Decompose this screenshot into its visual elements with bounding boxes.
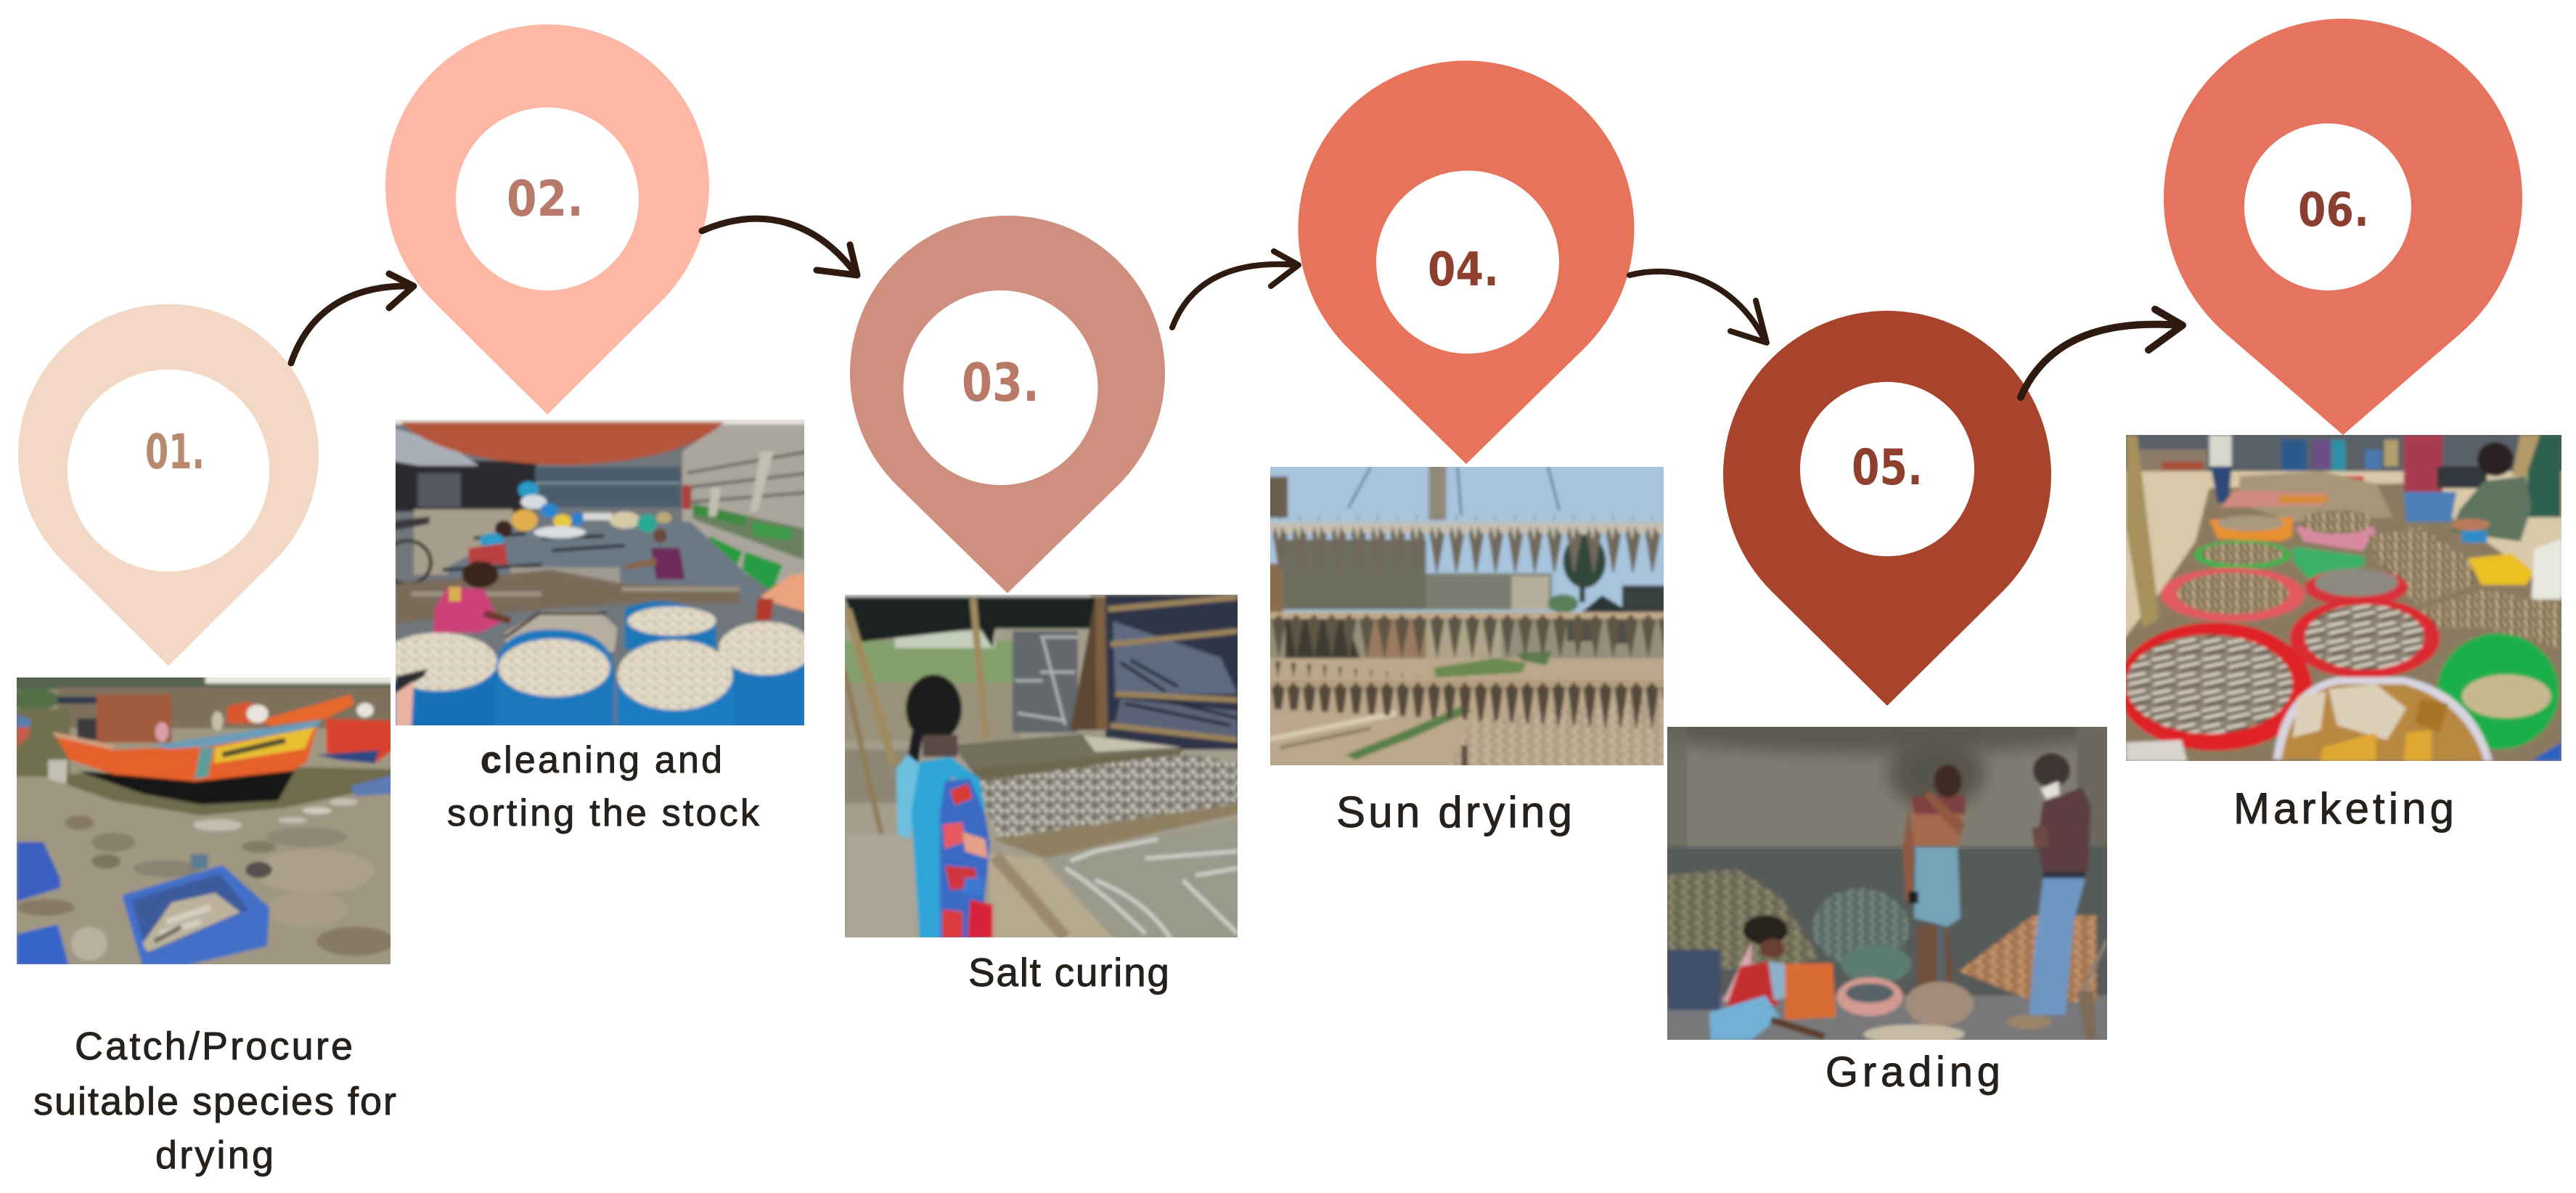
caption 01	[33, 1025, 396, 1177]
number 06: 06.	[2298, 184, 2369, 237]
caption 01: Catch/Procure	[75, 1025, 353, 1068]
number 01: 01.	[145, 424, 205, 480]
caption 02: sorting the stock	[447, 792, 760, 834]
arrow: step 3 to 4	[1172, 251, 1299, 327]
caption 06: Marketing	[2233, 784, 2454, 833]
caption 04: Sun drying	[1336, 788, 1572, 836]
photo: workers sorting fish beside blue drums	[396, 420, 804, 725]
photo: woman watching fish in salt curing tanks	[845, 595, 1238, 937]
photo: workers grading dried fish in a store room	[1667, 727, 2107, 1040]
photo: fish hanging on lines to sun dry	[1270, 467, 1664, 765]
pin 02	[385, 25, 709, 415]
caption 01: drying	[155, 1133, 274, 1177]
pin 04	[1298, 61, 1635, 464]
arrow: step 2 to 3	[702, 219, 857, 275]
pin 03	[850, 216, 1165, 593]
caption 02	[447, 739, 760, 834]
caption 05: Grading	[1825, 1049, 2000, 1096]
photo: dried fish in colourful baskets at a market	[2126, 435, 2561, 761]
arrow: step 4 to 5	[1630, 272, 1767, 343]
caption 01: suitable species for	[33, 1080, 396, 1123]
number 02: 02.	[507, 171, 584, 228]
caption 03: Salt curing	[968, 950, 1169, 995]
step 04	[1265, 61, 1670, 836]
caption 02: cleaning and	[481, 739, 722, 781]
step 05	[1628, 311, 2133, 1096]
arrow: step 5 to 6	[2021, 309, 2183, 397]
step 02	[380, 25, 812, 834]
pin 06	[2164, 19, 2522, 435]
number 05: 05.	[1852, 439, 1923, 497]
step 06	[2118, 19, 2567, 833]
arrow: step 1 to 2	[291, 274, 414, 363]
step 01	[7, 304, 399, 1177]
pin 01	[18, 304, 319, 666]
step 03	[840, 216, 1243, 995]
photo: fishing boats and fish crate on the shore	[17, 677, 391, 964]
number 03: 03.	[962, 352, 1039, 413]
number 04: 04.	[1428, 243, 1499, 297]
pin 05	[1723, 311, 2051, 706]
